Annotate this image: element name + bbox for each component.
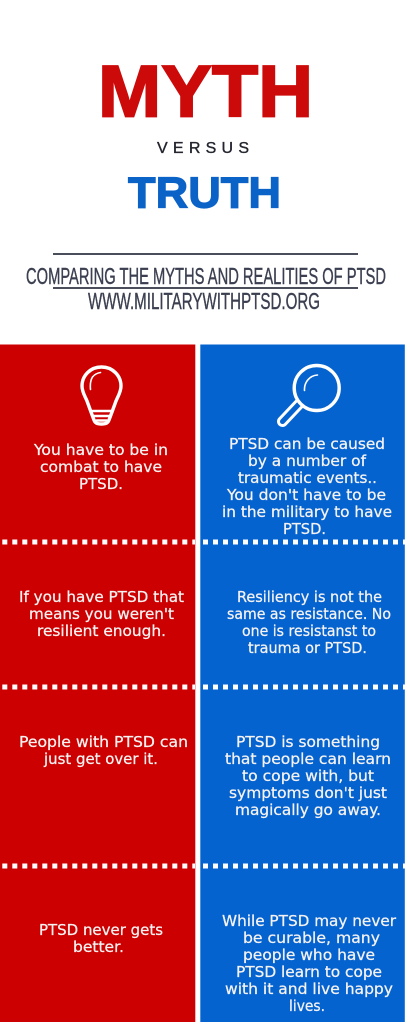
truth 3 text: symptoms don't just: [229, 784, 387, 802]
truth 2 text: Resiliency is not the: [237, 588, 382, 606]
truth 2 text: same as resistance. No: [227, 605, 391, 623]
truth 3 text: to cope with, but: [242, 767, 374, 785]
truth 3 text: magically go away.: [235, 801, 381, 819]
header: [26, 52, 386, 314]
truth 1 text: You don't have to be: [226, 486, 386, 504]
truth 2 text: [227, 588, 391, 657]
truth 1 text: PTSD.: [283, 520, 326, 538]
truth 4 text: While PTSD may never: [222, 912, 397, 930]
truth 1 text: in the military to have: [222, 503, 392, 521]
truth 4 text: be curable, many: [243, 929, 380, 947]
myth 2 text: If you have PTSD that: [19, 588, 184, 606]
truth 1 text: traumatic events..: [238, 469, 377, 487]
myth 4 text: PTSD never gets: [39, 921, 163, 939]
label: VERSUS: VERSUS: [157, 140, 249, 157]
myth 1 text: You have to be in: [33, 441, 168, 459]
truth 4 text: PTSD learn to cope: [236, 963, 382, 981]
myth 4 text: [39, 921, 163, 956]
title: MYTH: MYTH: [98, 52, 313, 132]
myth 1 text: combat to have: [40, 458, 162, 476]
truth 2 text: trauma or PTSD.: [248, 639, 367, 657]
myth 1 text: PTSD.: [79, 475, 123, 493]
truth 1 text: by a number of: [248, 452, 367, 470]
truth 4 text: lives.: [289, 997, 325, 1015]
myth 2 text: means you weren't: [29, 605, 174, 623]
truth 4 text: with it and live happy: [225, 980, 393, 998]
truth 1 text: PTSD can be caused: [229, 435, 385, 453]
myth 4 text: better.: [73, 938, 124, 956]
icon: magnifying glass: [282, 366, 339, 422]
icon: light bulb: [82, 367, 121, 424]
panel: truths: [200, 344, 405, 1022]
truth 3 text: PTSD is something: [236, 733, 380, 751]
myth 2 text: [19, 588, 184, 640]
myth 3 text: [19, 733, 188, 768]
myth 3 text: People with PTSD can: [19, 733, 188, 751]
truth 4 text: people who have: [243, 946, 375, 964]
truth 4 text: [222, 912, 397, 1015]
title: TRUTH: TRUTH: [128, 168, 281, 218]
truth 3 text: [225, 733, 391, 819]
panel: myths: [0, 344, 195, 1022]
truth 3 text: that people can learn: [225, 750, 391, 768]
myth 1 text: [33, 441, 168, 493]
myth 2 text: resilient enough.: [37, 622, 166, 640]
myth 3 text: just get over it.: [43, 750, 158, 768]
truth 1 text: [222, 435, 392, 538]
truth 2 text: one is resistanst to: [242, 622, 376, 640]
